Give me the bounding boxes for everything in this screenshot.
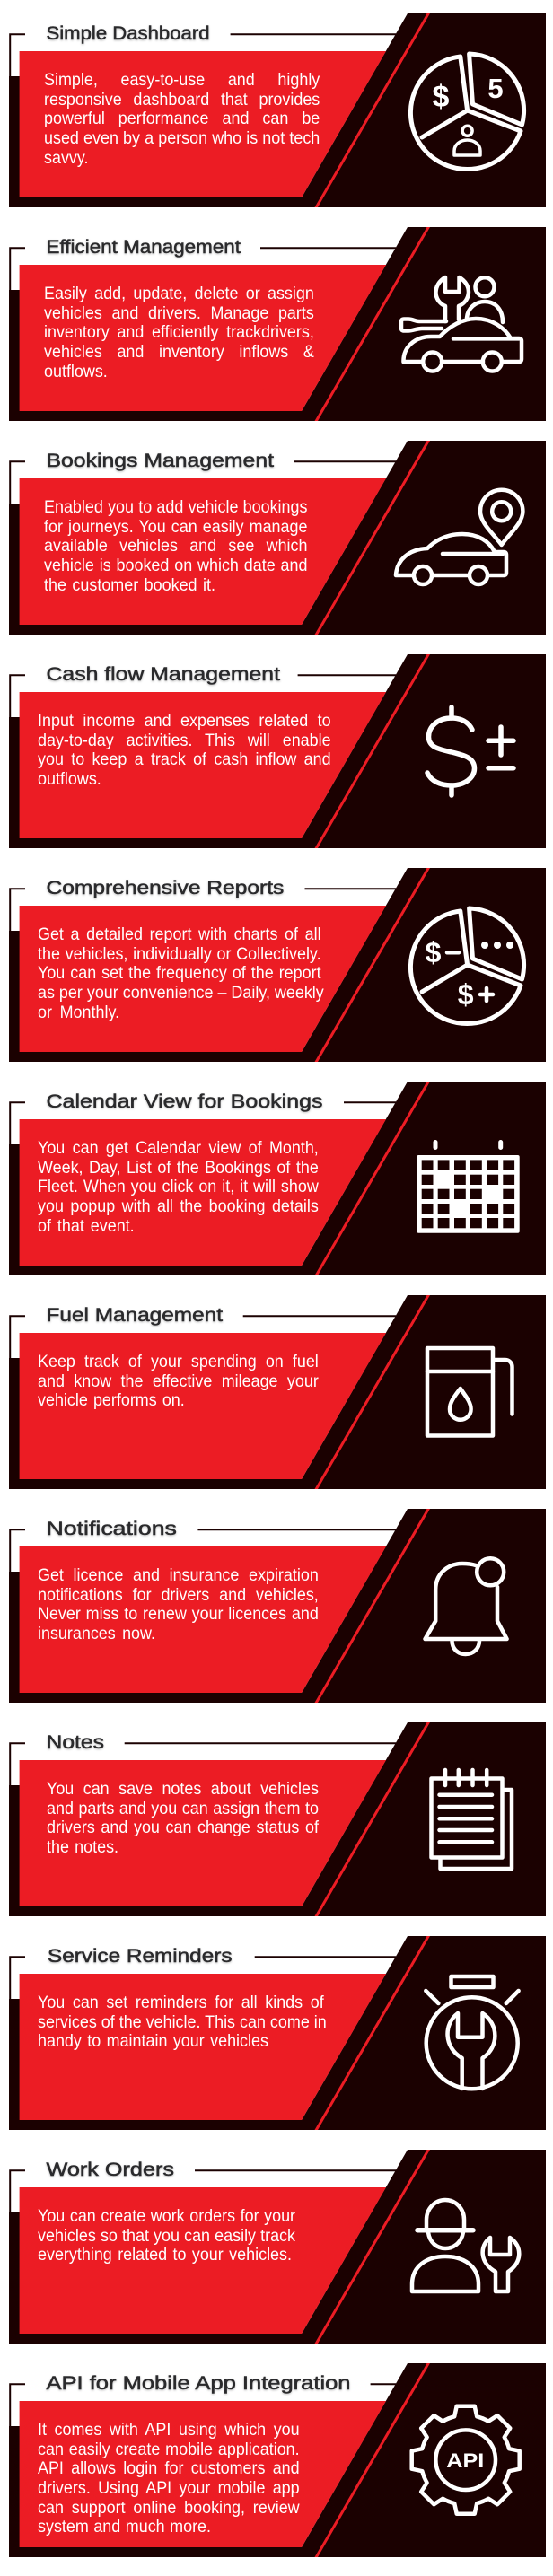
description text: You can set the frequency of the report bbox=[38, 963, 321, 983]
description text: It comes with API using which you bbox=[38, 2420, 300, 2440]
icon: calendar bbox=[417, 1143, 520, 1233]
icon: pie chart with income and expense symbols bbox=[410, 908, 524, 1024]
panel backdrop bbox=[9, 2150, 546, 2344]
icon: pie chart with dollar, five and person bbox=[410, 54, 524, 170]
description text: and parts and you can assign them to bbox=[47, 1799, 319, 1818]
description text: outflows. bbox=[38, 769, 101, 789]
description text: Enabled you to add vehicle bookings bbox=[44, 497, 308, 517]
heading: Efficient Management bbox=[47, 237, 241, 258]
heading: Simple Dashboard bbox=[47, 23, 210, 44]
panel backdrop bbox=[9, 1509, 546, 1703]
panel backdrop bbox=[9, 1936, 546, 2130]
icon: pie chart with dollar, five and person: $ bbox=[433, 80, 450, 114]
icon: stopwatch with wrench bbox=[426, 1976, 519, 2090]
heading rule bbox=[305, 889, 396, 890]
description text: can easily create mobile application. bbox=[38, 2440, 300, 2459]
description text bbox=[44, 70, 320, 168]
description text: vehicle is booked on which date and bbox=[44, 556, 308, 575]
description text: for journeys. You can easily manage bbox=[44, 517, 308, 537]
heading rule bbox=[344, 1102, 396, 1104]
description text bbox=[44, 497, 308, 595]
description text: notifications for drivers and vehicles, bbox=[38, 1585, 319, 1605]
description text: Simple, easy-to-use and highly bbox=[44, 70, 320, 90]
description text bbox=[38, 1138, 319, 1236]
heading rule bbox=[298, 675, 396, 677]
description text: Input income and expenses related to bbox=[38, 711, 331, 731]
heading: Calendar View for Bookings bbox=[47, 1091, 323, 1112]
heading rule bbox=[195, 2170, 396, 2172]
heading: Notifications bbox=[47, 1519, 177, 1539]
description text bbox=[38, 1352, 319, 1410]
icon: fuel pump bbox=[427, 1348, 512, 1436]
description text: you to keep a track of cash inflow and bbox=[38, 749, 331, 769]
icon: API gear bbox=[412, 2406, 520, 2514]
heading rule bbox=[125, 1743, 396, 1745]
panel backdrop bbox=[9, 1722, 546, 1916]
icon: pie chart with income and expense symbols: $ bbox=[426, 936, 442, 968]
panel: Efficient Management bbox=[9, 227, 546, 421]
description text: vehicles so that you can easily track bbox=[38, 2226, 295, 2246]
panel backdrop bbox=[9, 1082, 546, 1275]
heading: Fuel Management bbox=[47, 1305, 223, 1326]
heading: Cash flow Management bbox=[47, 664, 280, 685]
icon: car with location pin bbox=[396, 490, 522, 584]
panel: Cash flow Management bbox=[9, 654, 546, 848]
description text: Never miss to renew your licences and bbox=[38, 1604, 319, 1624]
heading rule bbox=[243, 1316, 396, 1318]
heading rule bbox=[255, 1957, 396, 1958]
panel backdrop bbox=[9, 654, 546, 848]
heading rule bbox=[294, 461, 396, 463]
description text: insurances now. bbox=[38, 1624, 155, 1643]
description text: as per your convenience – Daily, weekly bbox=[38, 983, 324, 1003]
description text: Get licence and insurance expiration bbox=[38, 1565, 319, 1585]
description text: vehicles and inventory inflows & bbox=[44, 342, 314, 362]
description text: you popup with all the booking details bbox=[38, 1196, 319, 1216]
heading: Comprehensive Reports bbox=[47, 878, 284, 898]
description text bbox=[38, 2420, 300, 2537]
heading: Service Reminders bbox=[48, 1946, 232, 1967]
icon: dollar with plus and minus bbox=[427, 707, 514, 795]
description text: used even by a person who is not tech bbox=[44, 128, 320, 148]
panel: Bookings Management bbox=[9, 441, 546, 635]
description text: You can set reminders for all kinds of bbox=[38, 1993, 324, 2012]
panel backdrop bbox=[9, 2363, 546, 2557]
panel: Comprehensive Reports bbox=[9, 868, 546, 1062]
icon: pie chart with dollar, five and person: 5 bbox=[487, 73, 504, 104]
panel: Simple Dashboard bbox=[9, 13, 546, 207]
description text bbox=[44, 284, 314, 381]
panel: Notifications bbox=[9, 1509, 546, 1703]
panel: Service Reminders bbox=[9, 1936, 546, 2130]
description text: can support online booking, review bbox=[38, 2498, 300, 2518]
panel: Notes bbox=[9, 1722, 546, 1916]
description text: system and much more. bbox=[38, 2517, 211, 2537]
heading rule bbox=[198, 1529, 396, 1531]
panel: Fuel Management bbox=[9, 1295, 546, 1489]
description text: vehicles and drivers. Manage parts bbox=[44, 303, 314, 323]
description text bbox=[38, 711, 331, 789]
description text: Week, Day, List of the Bookings of the bbox=[38, 1158, 319, 1178]
description text: available vehicles and see which bbox=[44, 536, 308, 556]
description text: API allows login for customers and bbox=[38, 2458, 300, 2478]
icon: API gear: API bbox=[446, 2449, 484, 2472]
description text: services of the vehicle. This can come in bbox=[38, 2012, 327, 2032]
description text bbox=[38, 2206, 295, 2265]
description text: drivers and you can change status of bbox=[47, 1818, 319, 1837]
description text: inventory and efficiently trackdrivers, bbox=[44, 322, 314, 342]
description text bbox=[38, 1565, 319, 1643]
description text: everything related to your vehicles. bbox=[38, 2245, 292, 2265]
description text: Keep track of your spending on fuel bbox=[38, 1352, 319, 1371]
description text: or Monthly. bbox=[38, 1003, 119, 1022]
description text: the customer booked it. bbox=[44, 575, 215, 595]
panel backdrop bbox=[9, 1295, 546, 1489]
description text: savvy. bbox=[44, 148, 89, 168]
panel backdrop bbox=[9, 13, 546, 207]
description text: Fleet. When you click on it, it will show bbox=[38, 1177, 319, 1196]
description text: and know the effective mileage your bbox=[38, 1371, 319, 1391]
icon: car with wrench, screwdriver and driver bbox=[401, 277, 522, 372]
icon: notepad bbox=[431, 1770, 512, 1869]
description text: powerful performance and can be bbox=[44, 109, 320, 128]
description text: the notes. bbox=[47, 1837, 118, 1857]
description text: responsive dashboard that provides bbox=[44, 90, 320, 110]
heading rule bbox=[260, 248, 396, 250]
panel backdrop bbox=[9, 868, 546, 1062]
heading: Work Orders bbox=[47, 2160, 174, 2180]
heading rule bbox=[371, 2384, 396, 2386]
heading: Notes bbox=[47, 1732, 104, 1753]
description text: the vehicles, individually or Collectively. bbox=[38, 944, 321, 964]
description text: You can get Calendar view of Month, bbox=[38, 1138, 319, 1158]
panel: Work Orders bbox=[9, 2150, 546, 2344]
description text: Easily add, update, delete or assign bbox=[44, 284, 314, 303]
description text bbox=[38, 1993, 327, 2051]
description text: drivers. Using API your mobile app bbox=[38, 2478, 300, 2498]
description text: vehicle performs on. bbox=[38, 1390, 185, 1410]
description text: You can save notes about vehicles bbox=[47, 1779, 319, 1799]
heading rule bbox=[231, 34, 396, 36]
description text: of that event. bbox=[38, 1216, 135, 1236]
panel backdrop bbox=[9, 227, 546, 421]
panel backdrop bbox=[9, 441, 546, 635]
heading: Bookings Management bbox=[47, 451, 274, 471]
panel: Calendar View for Bookings bbox=[9, 1082, 546, 1275]
description text: You can create work orders for your bbox=[38, 2206, 295, 2226]
description text: outflows. bbox=[44, 362, 108, 381]
panel: API for Mobile App Integration bbox=[9, 2363, 546, 2557]
description text: Get a detailed report with charts of all bbox=[38, 924, 321, 944]
description text bbox=[38, 924, 324, 1022]
description text bbox=[47, 1779, 319, 1857]
description text: day-to-day activities. This will enable bbox=[38, 731, 331, 750]
icon: worker with wrench bbox=[412, 2200, 519, 2291]
description text: handy to maintain your vehicles bbox=[38, 2031, 268, 2051]
icon: notification bell bbox=[426, 1559, 507, 1654]
heading: API for Mobile App Integration bbox=[47, 2373, 350, 2394]
icon: pie chart with income and expense symbols: $ bbox=[458, 978, 474, 1011]
